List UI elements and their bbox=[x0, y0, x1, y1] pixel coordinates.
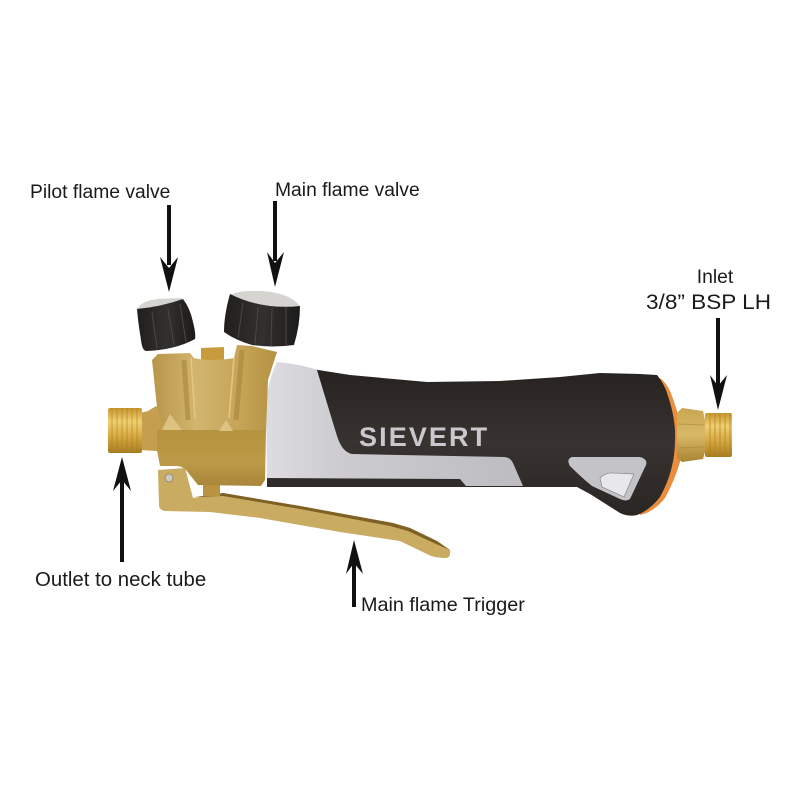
arrow: inlet bbox=[710, 318, 727, 410]
torch illustration bbox=[108, 291, 732, 558]
handle: chrome insert bbox=[600, 473, 634, 497]
fitting hex nut bbox=[677, 408, 705, 462]
trigger lever bbox=[158, 468, 450, 558]
handle: grey panel bbox=[266, 362, 523, 486]
pilot valve knob bbox=[137, 298, 195, 351]
pilot knob cap bbox=[137, 298, 186, 312]
nipple stem bbox=[140, 406, 170, 452]
upper body with lobes bbox=[152, 345, 277, 432]
arrow: main flame valve bbox=[267, 201, 284, 287]
lever dark upper edge bbox=[195, 493, 450, 550]
handle: grey thumb pad bbox=[568, 457, 646, 500]
centre brass pin bbox=[201, 347, 224, 360]
label: pilot flame valve: Pilot flame valve bbox=[30, 182, 170, 203]
handle: dark grip bbox=[267, 369, 675, 516]
outlet nipple bbox=[108, 406, 170, 453]
fitting thread bbox=[705, 413, 732, 457]
main knob body bbox=[224, 294, 300, 346]
label: inlet: Inlet bbox=[697, 267, 734, 288]
logo: SIEVERT: SIEVERT bbox=[359, 422, 489, 452]
arrow: pilot flame valve bbox=[160, 205, 178, 292]
brass valve body bbox=[152, 345, 277, 486]
inlet fitting bbox=[677, 408, 732, 462]
handle: orange rim bbox=[630, 378, 680, 515]
pilot knob body bbox=[137, 299, 195, 351]
label: outlet to neck tube: Outlet to neck tube bbox=[35, 569, 206, 591]
main knob cap bbox=[230, 291, 300, 308]
rib peaks bbox=[162, 414, 233, 431]
arrow: outlet bbox=[113, 457, 131, 562]
arrow: trigger bbox=[346, 540, 363, 607]
rib shading bbox=[191, 358, 234, 418]
main valve knob bbox=[224, 291, 300, 346]
trigger pin bbox=[203, 484, 220, 496]
nipple thread bbox=[108, 408, 142, 453]
label: main flame trigger: Main flame Trigger bbox=[361, 594, 525, 616]
label: inlet thread size: 3/8” BSP LH bbox=[646, 290, 771, 314]
label: main flame valve: Main flame valve bbox=[275, 180, 420, 201]
trigger rivet bbox=[165, 474, 173, 482]
lower block bbox=[157, 430, 266, 486]
